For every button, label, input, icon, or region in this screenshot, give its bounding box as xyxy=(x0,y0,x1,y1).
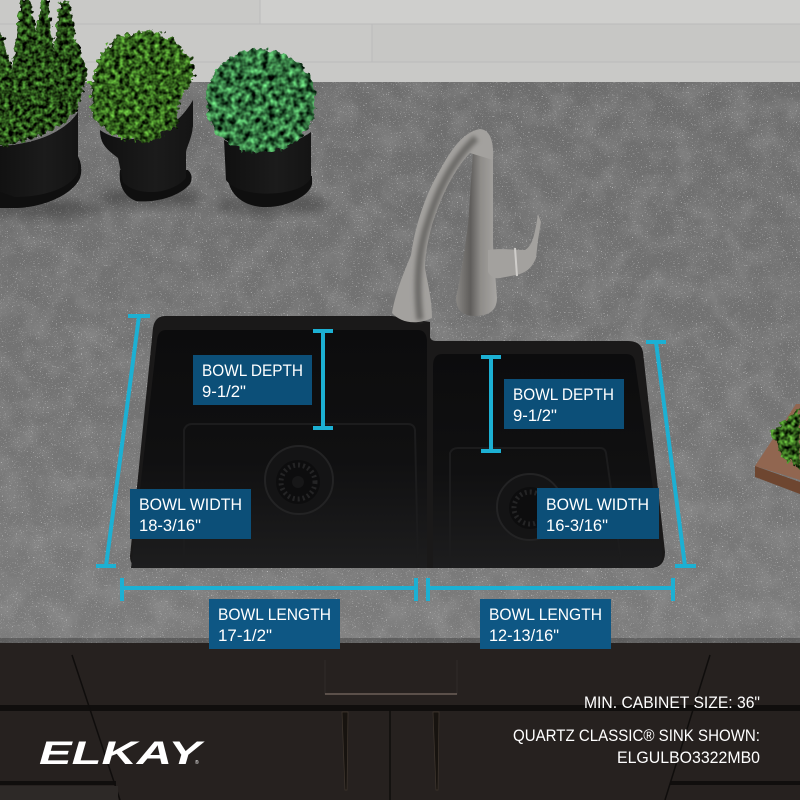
label: right bowl length: 12-13/16" xyxy=(489,626,559,645)
pot 1 xyxy=(0,112,81,208)
label: left bowl width xyxy=(130,489,251,539)
logo: Elkay xyxy=(39,735,205,771)
dimension line: left bowl length xyxy=(122,578,416,601)
text: sink shown: QUARTZ CLASSIC® SINK SHOWN: xyxy=(513,726,760,745)
dimension line: right bowl length xyxy=(428,578,673,601)
text: model number: ELGULBO3322MB0 xyxy=(617,748,760,767)
drain left xyxy=(265,446,333,514)
plant: round herb xyxy=(206,49,316,153)
label: right bowl length: BOWL LENGTH xyxy=(489,605,602,624)
herbs on board xyxy=(772,408,800,470)
label: right bowl length xyxy=(480,599,611,649)
label: right bowl depth: BOWL DEPTH xyxy=(513,385,614,404)
label: left bowl depth xyxy=(193,355,312,405)
plant: rosemary xyxy=(0,0,88,146)
dimension line: left bowl width xyxy=(96,316,150,566)
floor xyxy=(0,0,800,84)
spout shading xyxy=(418,138,476,320)
pot 3 xyxy=(224,132,312,207)
label: left bowl width: BOWL WIDTH xyxy=(139,495,242,514)
cutting board xyxy=(755,404,800,494)
right bowl floor xyxy=(450,448,622,568)
logo: Elkay: ELKAY xyxy=(39,735,205,771)
label: left bowl length: BOWL LENGTH xyxy=(218,605,331,624)
dimension line: right bowl depth xyxy=(481,357,501,451)
door handle right xyxy=(433,712,439,790)
logo: Elkay: ® xyxy=(195,759,199,766)
label: left bowl depth: 9-1/2" xyxy=(202,382,246,401)
door handle left xyxy=(342,712,348,790)
faucet spout xyxy=(392,129,493,322)
label: right bowl depth xyxy=(504,379,624,429)
label: left bowl length xyxy=(209,599,340,649)
sink xyxy=(130,316,665,568)
saucers and pots xyxy=(0,100,325,219)
pot 2 xyxy=(100,100,193,201)
countertop xyxy=(0,82,800,644)
faucet xyxy=(392,129,541,322)
label: right bowl width xyxy=(537,488,659,539)
sink rim xyxy=(130,316,665,568)
cabinet xyxy=(0,643,800,800)
sink bowl xyxy=(131,330,427,568)
faucet body xyxy=(456,148,497,316)
plant: parsley xyxy=(90,30,194,142)
drain right xyxy=(497,474,563,540)
dimension line: left bowl depth xyxy=(313,331,333,428)
right bowl xyxy=(433,354,662,568)
label: left bowl length: 17-1/2" xyxy=(218,626,272,645)
label: right bowl width: 16-3/16" xyxy=(546,516,608,535)
label: left bowl depth: BOWL DEPTH xyxy=(202,361,303,380)
label: right bowl depth: 9-1/2" xyxy=(513,406,557,425)
text: cabinet size: MIN. CABINET SIZE: 36" xyxy=(584,693,760,712)
label: left bowl width: 18-3/16" xyxy=(139,516,201,535)
drawer pull xyxy=(325,660,457,694)
left bowl floor xyxy=(184,424,418,568)
label: right bowl width: BOWL WIDTH xyxy=(546,495,649,514)
faucet handle xyxy=(488,214,541,278)
dimension line: right bowl width xyxy=(646,342,696,566)
